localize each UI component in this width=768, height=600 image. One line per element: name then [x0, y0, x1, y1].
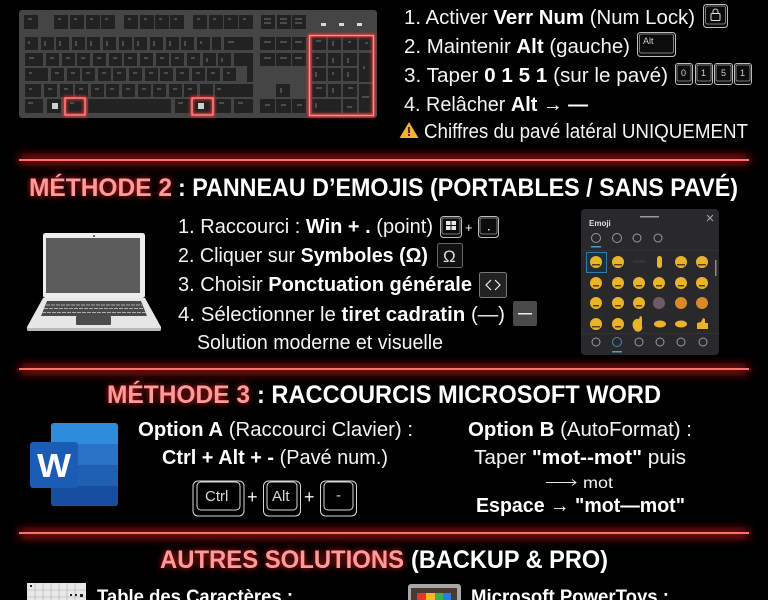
heading: method 2: MÉTHODE 2: [29, 173, 172, 202]
heading: method 3: MÉTHODE 3: [107, 380, 250, 409]
step 1: 1. Raccourci : Win + . (point): [178, 216, 433, 238]
icon: keys 0 1 5 1: 5: [721, 68, 726, 78]
tagline: Solution moderne et visuelle: [197, 332, 443, 354]
warning note: Chiffres du pavé latéral UNIQUEMENT: [424, 121, 748, 143]
step 3: 3. Taper 0 1 5 1 (sur le pavé): [404, 65, 668, 87]
heading: other solutions: [160, 546, 608, 574]
icon: keys 0 1 5 1: 0: [681, 68, 686, 78]
minus key: [320, 481, 356, 516]
heading: other solutions: AUTRES SOLUTIONS: [160, 546, 404, 574]
method 2 steps: [178, 216, 505, 354]
heading: other solutions: (BACKUP & PRO): [411, 546, 608, 574]
heading: method 3: [107, 380, 661, 409]
option A title: Option A (Raccourci Clavier) :: [138, 419, 413, 441]
minus key: -: [336, 487, 341, 504]
divider: top: [19, 156, 749, 163]
Ctrl key: [193, 481, 244, 516]
icon: omega key: Ω: [443, 247, 456, 266]
step 4: 4. Sélectionner le tiret cadratin (—): [178, 304, 505, 326]
option A shortcut: Ctrl + Alt + - (Pavé num.): [162, 447, 388, 469]
icon: keys 0 1 5 1: 1: [701, 68, 706, 78]
emoji panel: [581, 209, 719, 355]
keyboard illustration: [19, 10, 377, 118]
arrow with mot: mot: [583, 475, 614, 492]
option B result: Espace → "mot—mot": [476, 495, 685, 517]
arrow with mot: [546, 475, 614, 492]
step 3: 3. Choisir Ponctuation générale: [178, 274, 472, 296]
icon: point key: [478, 216, 498, 238]
step 1: 1. Activer Verr Num (Num Lock): [404, 7, 695, 29]
icon: em dash key: [513, 301, 537, 326]
step 4: 4. Relâcher Alt → —: [404, 94, 588, 116]
plus sign: +: [465, 220, 473, 235]
plus sign: +: [247, 487, 258, 507]
divider: middle: [19, 366, 749, 373]
icon: angle brackets key: [480, 272, 506, 298]
icon: Microsoft Word: [30, 423, 118, 506]
step 2: 2. Maintenir Alt (gauche): [404, 36, 630, 58]
icon: Microsoft Word: W: [37, 447, 72, 484]
option B title: Option B (AutoFormat) :: [468, 419, 692, 441]
Alt key: [264, 481, 300, 516]
icon: PowerToys: [408, 584, 461, 600]
plus sign: +: [304, 487, 315, 507]
icon: keys 0 1 5 1: [676, 64, 752, 84]
divider: bottom: [19, 530, 749, 537]
icon: character table: [27, 583, 86, 600]
icon: keys 0 1 5 1: 1: [740, 68, 745, 78]
icon: Alt key: Alt: [643, 36, 654, 46]
option B: [468, 419, 692, 517]
option B instruction: Taper "mot--mot" puis: [474, 447, 686, 469]
emoji panel: Emoji: [589, 219, 611, 228]
icon: warning triangle: [400, 122, 418, 138]
heading: method 3: : RACCOURCIS MICROSOFT WORD: [257, 381, 661, 409]
method 1 steps: [404, 7, 748, 143]
step 2: 2. Cliquer sur Symboles (Ω): [178, 245, 428, 267]
heading: method 2: : PANNEAU D’EMOJIS (PORTABLES / SANS PAVÉ): [178, 173, 738, 202]
Ctrl key: Ctrl: [205, 488, 228, 505]
icon: Alt key: [638, 32, 676, 56]
icon: lock key: [704, 4, 728, 28]
Alt key: Alt: [272, 488, 290, 505]
icon: laptop: [27, 233, 161, 331]
option A: [138, 419, 413, 516]
icon: omega key: [438, 244, 462, 268]
icon: Windows key: [440, 216, 462, 238]
